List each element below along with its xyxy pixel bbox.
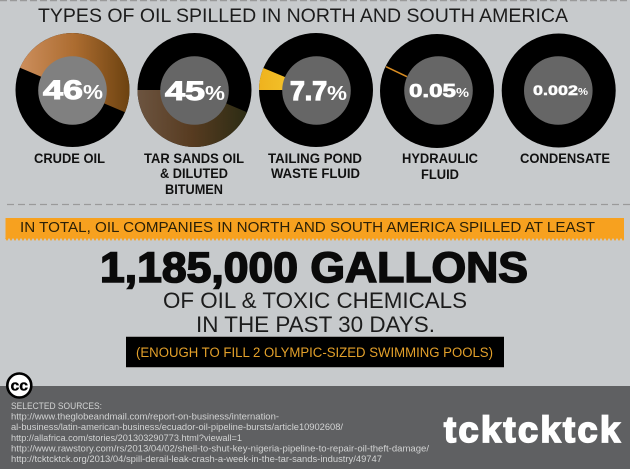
sources text: http://tcktcktck.org/2013/04/spill-derail-leak-crash-a-week-in-the-tar-sands-industry/49747 [11, 454, 382, 464]
donut: tailing pond 7.7%: 7.7 [290, 76, 327, 106]
donut: condensate 0.002% [502, 34, 616, 148]
sources text: http://www.rawstory.com/rs/2013/04/02/shell-to-shut-key-nigeria-pipeline-to-repair-oil-theft-damage/ [11, 444, 429, 454]
sources text: http://allafrica.com/stories/201303290773.html?viewall=1 [11, 433, 242, 443]
label: tar sands oil and diluted bitumen: & DILUTED [160, 166, 228, 181]
sources text: SELECTED SOURCES: [11, 401, 102, 411]
label: tar sands oil and diluted bitumen: BITUMEN [165, 182, 223, 197]
label: tailing pond waste fluid [268, 151, 362, 181]
label: condensate: CONDENSATE [520, 151, 610, 166]
donut: tar sands 45%: 45 [165, 76, 205, 106]
donut: crude oil 46% [16, 33, 130, 147]
label: hydraulic fluid: FLUID [421, 167, 459, 182]
callout: olympic pools: (ENOUGH TO FILL 2 OLYMPIC-SIZED SWIMMING POOLS) [136, 345, 493, 360]
donut: tar sands 45% [138, 33, 252, 147]
headline: gallons: 1,185,000 GALLONS [100, 244, 528, 292]
donut: crude oil 46%: % [83, 82, 103, 104]
donut: tar sands 45%: % [205, 83, 225, 105]
label: tailing pond waste fluid: WASTE FLUID [271, 166, 360, 181]
callout: olympic pools [126, 336, 504, 368]
subheading: IN THE PAST 30 DAYS. [196, 312, 435, 337]
logo: tcktcktck: tcktcktck [444, 409, 621, 450]
label: crude oil: CRUDE OIL [34, 151, 105, 166]
donut: hydraulic fluid 0.05% [380, 34, 494, 148]
donut: tailing pond 7.7% [259, 33, 373, 147]
donut: hydraulic fluid 0.05%: 0.05 [409, 81, 456, 101]
label: hydraulic fluid: HYDRAULIC [402, 151, 478, 166]
label: tar sands oil and diluted bitumen [144, 151, 244, 197]
label: hydraulic fluid [402, 151, 478, 182]
label: tar sands oil and diluted bitumen: TAR SANDS OIL [144, 151, 244, 166]
sources text [11, 401, 429, 464]
sources text: http://www.theglobeandmail.com/report-on-business/internation- [11, 412, 279, 422]
donut: hydraulic fluid 0.05%: % [456, 85, 469, 100]
subheading [163, 288, 467, 337]
footer panel [0, 386, 630, 469]
donut: condensate 0.002%: % [578, 87, 588, 98]
donut: condensate 0.002%: 0.002 [533, 83, 578, 98]
orange banner: IN TOTAL, OIL COMPANIES IN NORTH AND SOUTH AMERICA SPILLED AT LEAST [20, 219, 595, 236]
icon: creative commons: cc [10, 378, 28, 394]
title: TYPES OF OIL SPILLED IN NORTH AND SOUTH AMERICA [38, 5, 568, 27]
orange banner [5, 218, 624, 241]
label: tailing pond waste fluid: TAILING POND [268, 151, 362, 166]
subheading: OF OIL & TOXIC CHEMICALS [163, 288, 467, 313]
sources text: al-business/latin-american-business/ecuador-oil-pipeline-bursts/article10902608/ [11, 422, 343, 432]
donut: crude oil 46%: 46 [43, 75, 83, 105]
donut: tailing pond 7.7%: % [327, 83, 347, 105]
icon: creative commons [7, 374, 31, 398]
